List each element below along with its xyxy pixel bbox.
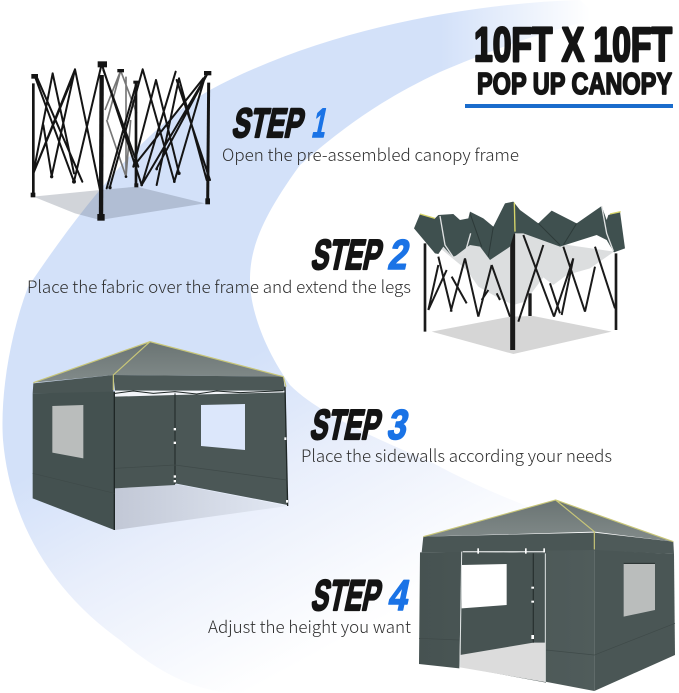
step 2 heading: 2 [385, 231, 414, 278]
white gap below valance [115, 391, 285, 397]
yellow roof seams [33, 342, 286, 390]
step 2 description: Place the fabric over the frame and extend the legs [27, 273, 411, 298]
roof [33, 342, 283, 383]
windows [52, 405, 83, 458]
step 1 heading: STEP [229, 99, 309, 146]
door opening interior [460, 552, 546, 683]
step 4 heading: STEP [308, 572, 386, 620]
step 4 description: Adjust the height you want [208, 613, 411, 638]
step 4 heading: 4 [385, 572, 414, 620]
step 2 heading: STEP [308, 231, 387, 278]
step 4 illustration: enclosed canopy with door [419, 500, 675, 691]
step 1 illustration: bare frame [31, 61, 211, 221]
front and side wall [419, 550, 594, 691]
side window [624, 564, 655, 617]
step 3 heading: 3 [384, 401, 413, 448]
folded canopy fabric [414, 202, 625, 260]
ground shadow [33, 187, 205, 220]
inner window [462, 564, 507, 608]
step 1 description: Open the pre-assembled canopy frame [222, 141, 519, 166]
floor [115, 484, 288, 530]
silver underside [438, 230, 614, 305]
yellow roof seams [423, 500, 673, 549]
roof [423, 500, 673, 542]
valance [33, 375, 113, 393]
step 3 heading: STEP [307, 401, 386, 448]
ground shadow [432, 316, 612, 354]
title [465, 19, 673, 108]
back walls [115, 395, 175, 488]
step 2 illustration: frame with fabric [414, 202, 625, 354]
floor [460, 643, 545, 682]
step 1 heading: 1 [309, 99, 332, 146]
step 3 description: Place the sidewalls according your needs [301, 442, 612, 467]
left wall [33, 392, 114, 530]
step 3 illustration: canopy with sidewalls [33, 342, 288, 530]
title underline [465, 104, 673, 108]
valance [422, 533, 594, 552]
